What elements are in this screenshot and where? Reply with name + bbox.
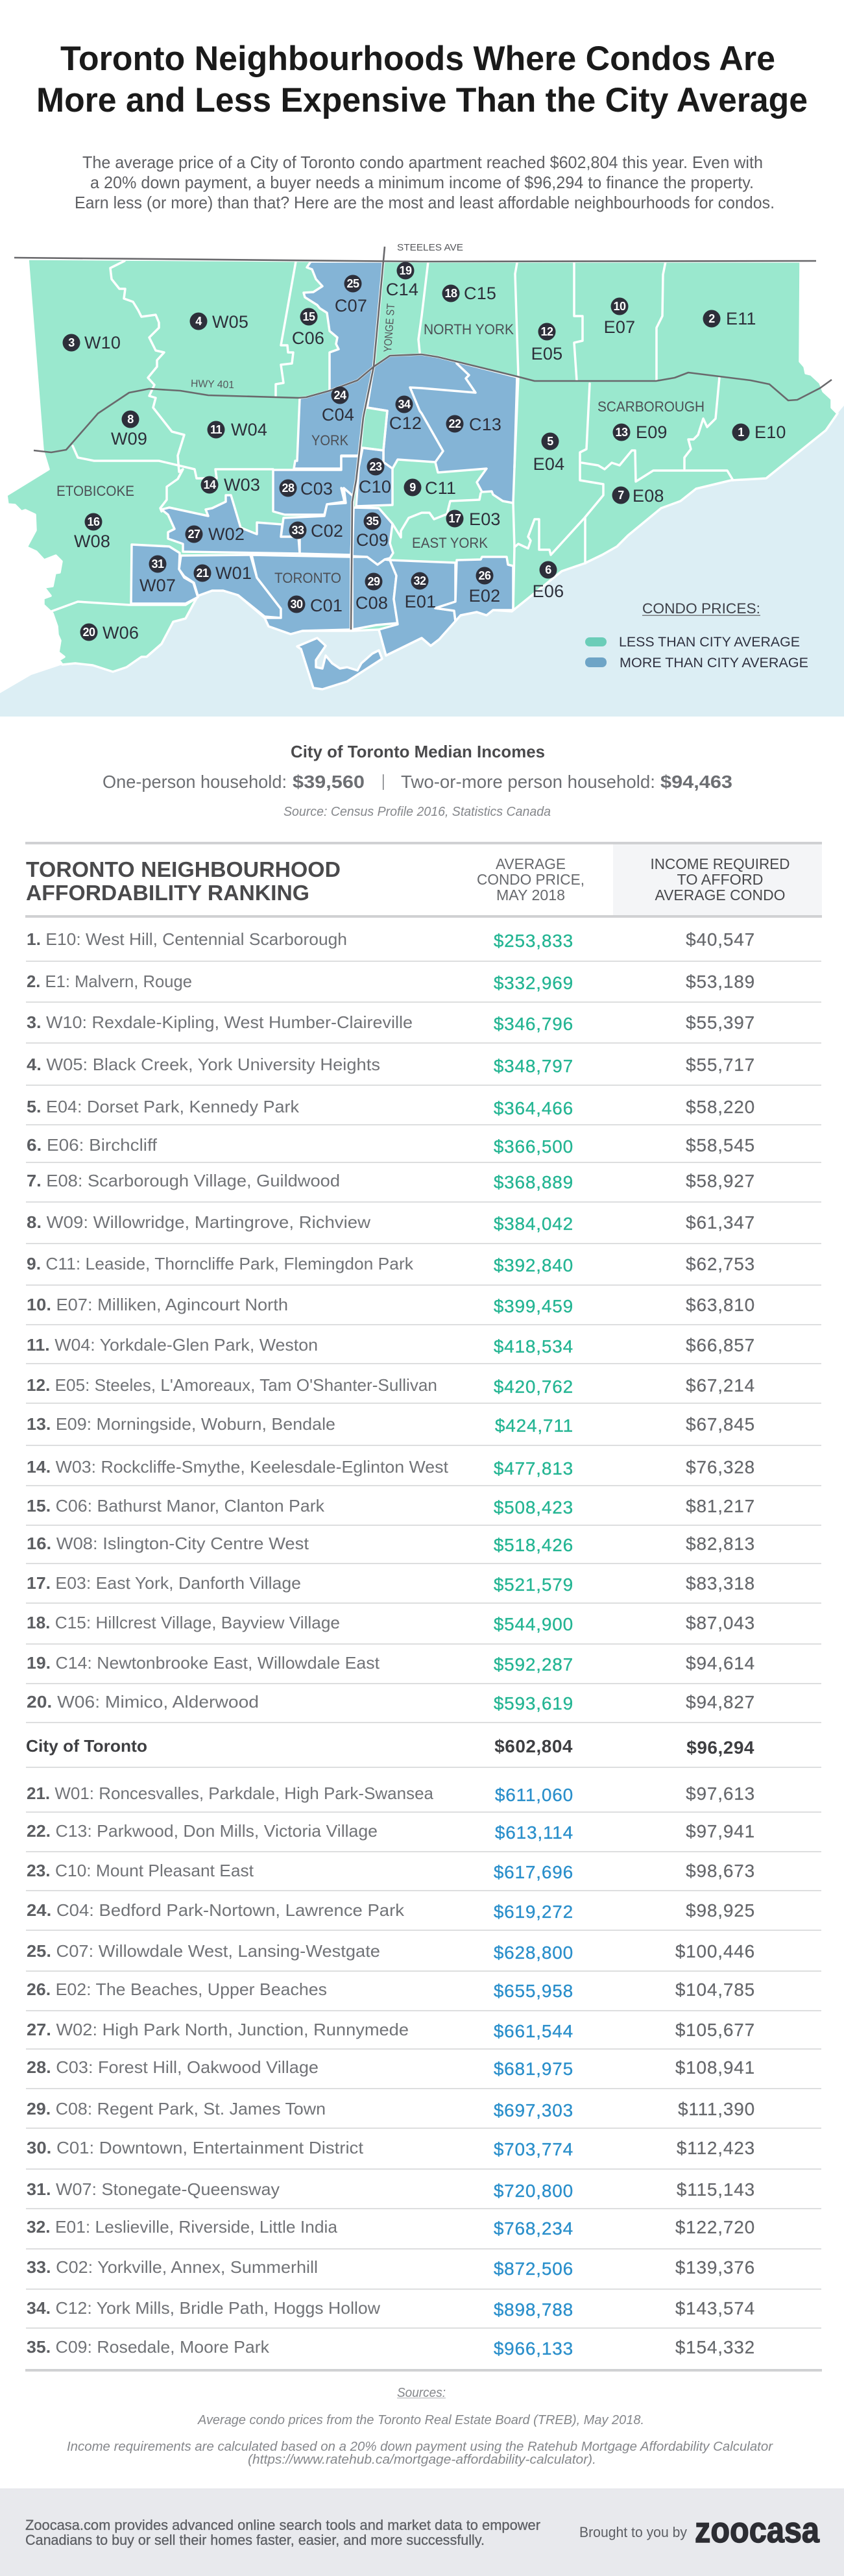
row 2: 2. E1: Malvern, Rouge xyxy=(27,972,192,991)
road labels: STEELES AVE xyxy=(397,242,463,253)
row 3: $346,796 xyxy=(494,1014,573,1034)
row 18: 18. C15: Hillcrest Village, Bayview Village xyxy=(27,1613,340,1632)
table header xyxy=(25,842,822,918)
neighbourhood markers: E04 xyxy=(533,454,564,474)
title: More and Less Expensive Than the City Average xyxy=(36,81,808,119)
row 29: $111,390 xyxy=(678,2099,755,2119)
row 33: $139,376 xyxy=(675,2257,755,2277)
row 14: $76,328 xyxy=(686,1457,755,1477)
neighbourhood markers: 20 xyxy=(82,626,95,639)
row 10: $399,459 xyxy=(494,1296,573,1316)
row 34: 34. C12: York Mills, Bridle Path, Hoggs Hollow xyxy=(27,2298,380,2318)
road labels: YONGE ST xyxy=(381,303,397,352)
row 4: $348,797 xyxy=(494,1056,573,1076)
neighbourhood markers: 17 xyxy=(448,512,461,525)
neighbourhood markers: C10 xyxy=(359,477,391,497)
row 3 xyxy=(27,1012,755,1034)
intro text: Earn less (or more) than that? Here are the most and least affordable neighbourhoods for condos. xyxy=(75,193,775,212)
neighbourhood markers: W10 xyxy=(84,333,121,352)
row 1 xyxy=(27,929,755,951)
row 28: 28. C03: Forest Hill, Oakwood Village xyxy=(27,2057,319,2077)
neighbourhood markers: C02 xyxy=(311,521,343,541)
row 4: $55,717 xyxy=(686,1055,755,1075)
row 16 xyxy=(27,1534,755,1555)
row 24: $619,272 xyxy=(494,1902,573,1922)
row 16: $82,813 xyxy=(686,1534,755,1554)
table header: CONDO PRICE, xyxy=(477,871,585,888)
neighbourhood markers: 11 xyxy=(210,423,223,436)
neighbourhood markers: 23 xyxy=(369,460,382,473)
row 17: $83,318 xyxy=(686,1573,755,1593)
row 21: $97,613 xyxy=(686,1784,755,1804)
neighbourhood markers: C03 xyxy=(300,479,333,498)
row 12: $420,762 xyxy=(494,1377,573,1397)
footer band xyxy=(0,2488,844,2576)
neighbourhood markers: 7 xyxy=(618,489,624,502)
row 26: $655,958 xyxy=(494,1981,573,2001)
table rows xyxy=(26,929,755,2359)
row 24 xyxy=(27,1900,755,1922)
neighbourhood markers: C14 xyxy=(386,280,418,299)
land: less than city average neighbourhoods xyxy=(6,259,838,672)
row: City of Toronto: City of Toronto xyxy=(26,1736,147,1756)
row 29: 29. C08: Regent Park, St. James Town xyxy=(27,2099,326,2118)
neighbourhood markers: 33 xyxy=(291,524,304,537)
row 33: $872,506 xyxy=(494,2259,573,2279)
row 30 xyxy=(27,2138,755,2159)
row 27: 27. W02: High Park North, Junction, Runnymede xyxy=(27,2020,409,2039)
row 30: 30. C01: Downtown, Entertainment District xyxy=(27,2138,364,2157)
row 30: $703,774 xyxy=(494,2139,573,2159)
row 31: 31. W07: Stonegate-Queensway xyxy=(27,2179,280,2199)
neighbourhood markers: C09 xyxy=(356,530,389,550)
row 4 xyxy=(27,1055,755,1076)
row: City of Toronto xyxy=(26,1736,754,1758)
row 20: $593,619 xyxy=(494,1693,573,1713)
row 13 xyxy=(27,1414,755,1436)
row 1: $40,547 xyxy=(686,929,755,950)
row 19 xyxy=(27,1653,755,1674)
row 18 xyxy=(27,1613,755,1634)
sources: Average condo prices from the Toronto Real Estate Board (TREB), May 2018. xyxy=(197,2413,644,2427)
row 18: $544,900 xyxy=(494,1614,573,1634)
row 7 xyxy=(27,1171,755,1192)
neighbourhood markers: W02 xyxy=(208,524,245,544)
row 28 xyxy=(27,2057,755,2079)
roads xyxy=(14,247,832,630)
district names: ETOBICOKE xyxy=(56,483,134,499)
row 32: 32. E01: Leslieville, Riverside, Little India xyxy=(27,2217,338,2237)
sources: Sources: xyxy=(397,2386,446,2400)
neighbourhood markers: 9 xyxy=(409,481,416,494)
row 15: $81,217 xyxy=(686,1496,755,1516)
row 6: $366,500 xyxy=(494,1136,573,1157)
table header: INCOME REQUIRED xyxy=(650,855,790,872)
row 22: 22. C13: Parkwood, Don Mills, Victoria Village xyxy=(27,1821,378,1841)
neighbourhood markers: 31 xyxy=(151,558,164,570)
row 25: $100,446 xyxy=(675,1941,755,1961)
row 14: $477,813 xyxy=(494,1458,573,1478)
legend: condo prices: LESS THAN CITY AVERAGE xyxy=(619,635,800,650)
row 23: $617,696 xyxy=(494,1862,573,1882)
row: City of Toronto: $602,804 xyxy=(494,1736,573,1756)
median incomes block: $94,463 xyxy=(660,772,732,792)
intro text: The average price of a City of Toronto condo apartment reached $602,804 this year. Even with xyxy=(82,153,763,172)
neighbourhood markers: 25 xyxy=(346,277,359,290)
median incomes block: Source: Census Profile 2016, Statistics Canada xyxy=(283,805,551,819)
legend: condo prices: MORE THAN CITY AVERAGE xyxy=(620,656,808,670)
row 27 xyxy=(27,2020,755,2041)
table header: TO AFFORD xyxy=(677,871,763,888)
intro text xyxy=(75,153,775,212)
neighbourhood markers: W01 xyxy=(215,563,252,583)
neighbourhood markers xyxy=(62,262,786,643)
neighbourhood markers: E10 xyxy=(754,423,786,442)
legend: condo prices: CONDO PRICES: xyxy=(642,600,760,617)
row 16: $518,426 xyxy=(494,1535,573,1555)
neighbourhood markers: 2 xyxy=(708,312,715,325)
row 13: $424,711 xyxy=(495,1416,573,1436)
title xyxy=(36,40,808,119)
neighbourhood markers: 6 xyxy=(545,563,551,576)
row 11: $66,857 xyxy=(686,1335,755,1355)
row 7: $58,927 xyxy=(686,1171,755,1191)
neighbourhood markers: 10 xyxy=(613,300,626,313)
row 9: 9. C11: Leaside, Thorncliffe Park, Flemingdon Park xyxy=(27,1254,414,1273)
neighbourhood markers: W08 xyxy=(74,532,110,551)
title: Toronto Neighbourhoods Where Condos Are xyxy=(60,40,775,78)
row 21: $611,060 xyxy=(495,1785,573,1805)
row 29 xyxy=(27,2099,755,2120)
row 12: $67,214 xyxy=(686,1375,755,1395)
row 35: $966,133 xyxy=(494,2338,573,2359)
footer description: Canadians to buy or sell their homes faster, easier, and more successfully. xyxy=(25,2532,485,2548)
neighbourhood markers: E03 xyxy=(469,509,501,529)
neighbourhood markers: 28 xyxy=(282,482,295,495)
neighbourhood markers: E01 xyxy=(405,592,436,611)
row 2: $332,969 xyxy=(494,973,573,993)
row 11: 11. W04: Yorkdale-Glen Park, Weston xyxy=(27,1335,318,1355)
row 5: 5. E04: Dorset Park, Kennedy Park xyxy=(27,1097,300,1116)
row 2 xyxy=(27,972,755,993)
median incomes block: $39,560 xyxy=(293,772,365,792)
neighbourhood markers: E02 xyxy=(469,586,500,606)
row 10: 10. E07: Milliken, Agincourt North xyxy=(27,1295,288,1314)
row 20 xyxy=(27,1692,755,1713)
neighbourhood markers: 1 xyxy=(738,426,744,439)
neighbourhood markers: C11 xyxy=(425,478,456,498)
row 35: $154,332 xyxy=(675,2337,755,2357)
neighbourhood markers: C12 xyxy=(389,413,422,433)
blue neighbourhoods: more than city average xyxy=(131,262,517,689)
neighbourhood markers: C01 xyxy=(310,596,343,615)
row 20: $94,827 xyxy=(686,1692,755,1712)
neighbourhood markers: 24 xyxy=(333,389,346,402)
row 11: $418,534 xyxy=(494,1336,573,1356)
row 10 xyxy=(27,1295,755,1316)
district names: EAST YORK xyxy=(412,535,488,551)
table header: MAY 2018 xyxy=(496,887,565,903)
row 31: $720,800 xyxy=(494,2181,573,2201)
row 23: 23. C10: Mount Pleasant East xyxy=(27,1861,254,1880)
map panel xyxy=(0,242,844,717)
neighbourhood boundaries xyxy=(51,261,733,611)
row 8 xyxy=(27,1212,755,1234)
neighbourhood markers: E06 xyxy=(533,582,564,601)
neighbourhood markers: 19 xyxy=(399,264,412,277)
row 1: $253,833 xyxy=(494,931,573,951)
row 24: $98,925 xyxy=(686,1900,755,1920)
row 25 xyxy=(27,1941,755,1963)
row 26: 26. E02: The Beaches, Upper Beaches xyxy=(27,1980,327,1999)
row 3: $55,397 xyxy=(686,1012,755,1033)
row 24: 24. C04: Bedford Park-Nortown, Lawrence Park xyxy=(27,1900,405,1920)
row 23: $98,673 xyxy=(686,1861,755,1881)
table row dividers xyxy=(25,961,822,2372)
neighbourhood markers: E07 xyxy=(604,317,635,337)
neighbourhood markers: C15 xyxy=(464,284,496,303)
median incomes block: Two-or-more person household: xyxy=(401,772,655,792)
row 5: $364,466 xyxy=(494,1098,573,1118)
median incomes block xyxy=(102,742,732,819)
neighbourhood markers: 29 xyxy=(367,575,380,588)
row 33: 33. C02: Yorkville, Annex, Summerhill xyxy=(27,2257,318,2277)
row 8: 8. W09: Willowridge, Martingrove, Richview xyxy=(27,1212,370,1232)
row 6: 6. E06: Birchcliff xyxy=(27,1135,158,1155)
row 2: $53,189 xyxy=(686,972,755,992)
district names xyxy=(56,321,705,586)
row 8: $384,042 xyxy=(494,1214,573,1234)
road labels xyxy=(191,242,463,391)
row 27: $105,677 xyxy=(675,2020,755,2040)
neighbourhood markers: W07 xyxy=(139,576,176,595)
row 11 xyxy=(27,1335,755,1356)
neighbourhood markers: 8 xyxy=(127,413,134,426)
neighbourhood markers: 14 xyxy=(203,478,216,491)
neighbourhood markers: W09 xyxy=(111,429,147,448)
row 17: $521,579 xyxy=(494,1575,573,1595)
intro text: a 20% down payment, a buyer needs a minimum income of $96,294 to finance the property. xyxy=(90,173,754,192)
row 31: $115,143 xyxy=(677,2179,755,2200)
neighbourhood markers: C08 xyxy=(356,593,388,613)
row 7: 7. E08: Scarborough Village, Guildwood xyxy=(27,1171,340,1190)
neighbourhood markers: W04 xyxy=(231,420,267,439)
sources: Income requirements are calculated based on a 20% down payment using the Ratehub Mortgage Affordability Calculator xyxy=(67,2440,773,2454)
table header: AVERAGE xyxy=(496,855,566,872)
sources xyxy=(67,2386,773,2467)
row 35 xyxy=(27,2337,755,2359)
row 35: 35. C09: Rosedale, Moore Park xyxy=(27,2337,270,2357)
neighbourhood markers: 18 xyxy=(444,287,457,300)
neighbourhood markers: C13 xyxy=(469,415,501,434)
neighbourhood markers: 30 xyxy=(290,598,303,611)
row 9 xyxy=(27,1254,755,1275)
neighbourhood markers: W05 xyxy=(212,312,248,332)
row 22: $97,941 xyxy=(686,1821,755,1841)
road labels: HWY 401 xyxy=(191,378,234,391)
row 19: $592,287 xyxy=(494,1654,573,1674)
row 28: $108,941 xyxy=(675,2057,755,2078)
neighbourhood markers: 13 xyxy=(615,426,628,439)
row 15: 15. C06: Bathurst Manor, Clanton Park xyxy=(27,1496,325,1515)
row 20: 20. W06: Mimico, Alderwood xyxy=(27,1692,259,1711)
row 22: $613,114 xyxy=(495,1822,573,1843)
logo: zoocasa wordmark: zoocasa xyxy=(695,2509,820,2550)
row 22 xyxy=(27,1821,755,1843)
row 32 xyxy=(27,2217,755,2239)
neighbourhood markers: E11 xyxy=(726,309,756,328)
row 14: 14. W03: Rockcliffe-Smythe, Keelesdale-Eglinton West xyxy=(27,1457,449,1477)
row 8: $61,347 xyxy=(686,1212,755,1233)
row 1: 1. E10: West Hill, Centennial Scarborough xyxy=(27,929,347,949)
row 27: $661,544 xyxy=(494,2021,573,2041)
row 14 xyxy=(27,1457,755,1478)
neighbourhood markers: 5 xyxy=(547,435,553,448)
neighbourhood markers: 26 xyxy=(478,569,491,582)
table header: AVERAGE CONDO xyxy=(655,887,785,903)
row 6 xyxy=(27,1135,755,1157)
neighbourhood markers: 12 xyxy=(540,325,553,338)
row 25: 25. C07: Willowdale West, Lansing-Westgate xyxy=(27,1941,380,1961)
row 7: $368,889 xyxy=(494,1172,573,1192)
footer description xyxy=(25,2517,540,2548)
row 33 xyxy=(27,2257,755,2279)
neighbourhood markers: 22 xyxy=(448,417,461,430)
row 25: $628,800 xyxy=(494,1943,573,1963)
neighbourhood markers: 15 xyxy=(302,310,315,323)
neighbourhood markers: C06 xyxy=(292,328,324,348)
row 17 xyxy=(27,1573,755,1595)
row 32: $122,720 xyxy=(675,2217,755,2237)
row 16: 16. W08: Islington-City Centre West xyxy=(27,1534,309,1553)
district names: SCARBOROUGH xyxy=(597,399,705,415)
row 6: $58,545 xyxy=(686,1135,755,1155)
neighbourhood markers: E08 xyxy=(633,486,664,506)
table header: TORONTO NEIGHBOURHOOD xyxy=(26,857,341,881)
neighbourhood markers: C07 xyxy=(335,296,367,315)
row 10: $63,810 xyxy=(686,1295,755,1315)
table header: AFFORDABILITY RANKING xyxy=(26,881,309,905)
district names: NORTH YORK xyxy=(424,321,514,337)
district names: TORONTO xyxy=(274,570,341,586)
row 5 xyxy=(27,1097,755,1118)
row 9: $62,753 xyxy=(686,1254,755,1274)
row 30: $112,423 xyxy=(677,2138,755,2158)
neighbourhood markers: 34 xyxy=(398,398,411,411)
row 13: 13. E09: Morningside, Woburn, Bendale xyxy=(27,1414,335,1434)
row 34: $143,574 xyxy=(675,2298,755,2318)
neighbourhood markers: 3 xyxy=(68,336,75,349)
row 21: 21. W01: Roncesvalles, Parkdale, High Park-Swansea xyxy=(27,1784,434,1803)
row 34 xyxy=(27,2298,755,2320)
row 32: $768,234 xyxy=(494,2218,573,2239)
row 31 xyxy=(27,2179,755,2201)
neighbourhood markers: 4 xyxy=(195,315,202,328)
row: City of Toronto: $96,294 xyxy=(686,1737,754,1758)
footer description: Zoocasa.com provides advanced online search tools and market data to empower xyxy=(25,2517,540,2533)
neighbourhood markers: 32 xyxy=(413,574,426,587)
row 15 xyxy=(27,1496,755,1517)
neighbourhood markers: C04 xyxy=(322,405,354,424)
legend: condo prices xyxy=(585,600,808,670)
neighbourhood markers: W06 xyxy=(102,623,139,643)
row 5: $58,220 xyxy=(686,1097,755,1117)
row 19: 19. C14: Newtonbrooke East, Willowdale East xyxy=(27,1653,380,1673)
row 13: $67,845 xyxy=(686,1414,755,1434)
lake water xyxy=(0,406,844,717)
row 34: $898,788 xyxy=(494,2300,573,2320)
neighbourhood markers: E05 xyxy=(531,344,562,363)
brought to you by: Brought to you by xyxy=(579,2524,687,2540)
row 15: $508,423 xyxy=(494,1497,573,1517)
row 19: $94,614 xyxy=(686,1653,755,1673)
row 9: $392,840 xyxy=(494,1255,573,1275)
row 21 xyxy=(27,1784,755,1805)
sources: (https://www.ratehub.ca/mortgage-affordability-calculator). xyxy=(248,2453,596,2467)
row 26: $104,785 xyxy=(675,1980,755,2000)
row 12 xyxy=(27,1375,755,1397)
row 29: $697,303 xyxy=(494,2100,573,2120)
neighbourhood markers: 27 xyxy=(187,528,200,541)
row 17: 17. E03: East York, Danforth Village xyxy=(27,1573,301,1593)
median incomes block: City of Toronto Median Incomes xyxy=(291,742,545,761)
neighbourhood markers: 16 xyxy=(87,515,100,528)
median incomes block: One-person household: xyxy=(102,772,287,792)
neighbourhood markers: E09 xyxy=(636,423,668,442)
row 23 xyxy=(27,1861,755,1882)
neighbourhood markers: 35 xyxy=(366,515,379,528)
row 3: 3. W10: Rexdale-Kipling, West Humber-Claireville xyxy=(27,1012,413,1032)
row 4: 4. W05: Black Creek, York University Heights xyxy=(27,1055,380,1074)
row 12: 12. E05: Steeles, L'Amoreaux, Tam O'Shanter-Sullivan xyxy=(27,1375,437,1395)
row 26 xyxy=(27,1980,755,2001)
row 18: $87,043 xyxy=(686,1613,755,1633)
neighbourhood markers: 21 xyxy=(196,567,209,580)
district names: YORK xyxy=(311,432,348,448)
row 28: $681,975 xyxy=(494,2059,573,2079)
neighbourhood markers: W03 xyxy=(224,475,260,495)
